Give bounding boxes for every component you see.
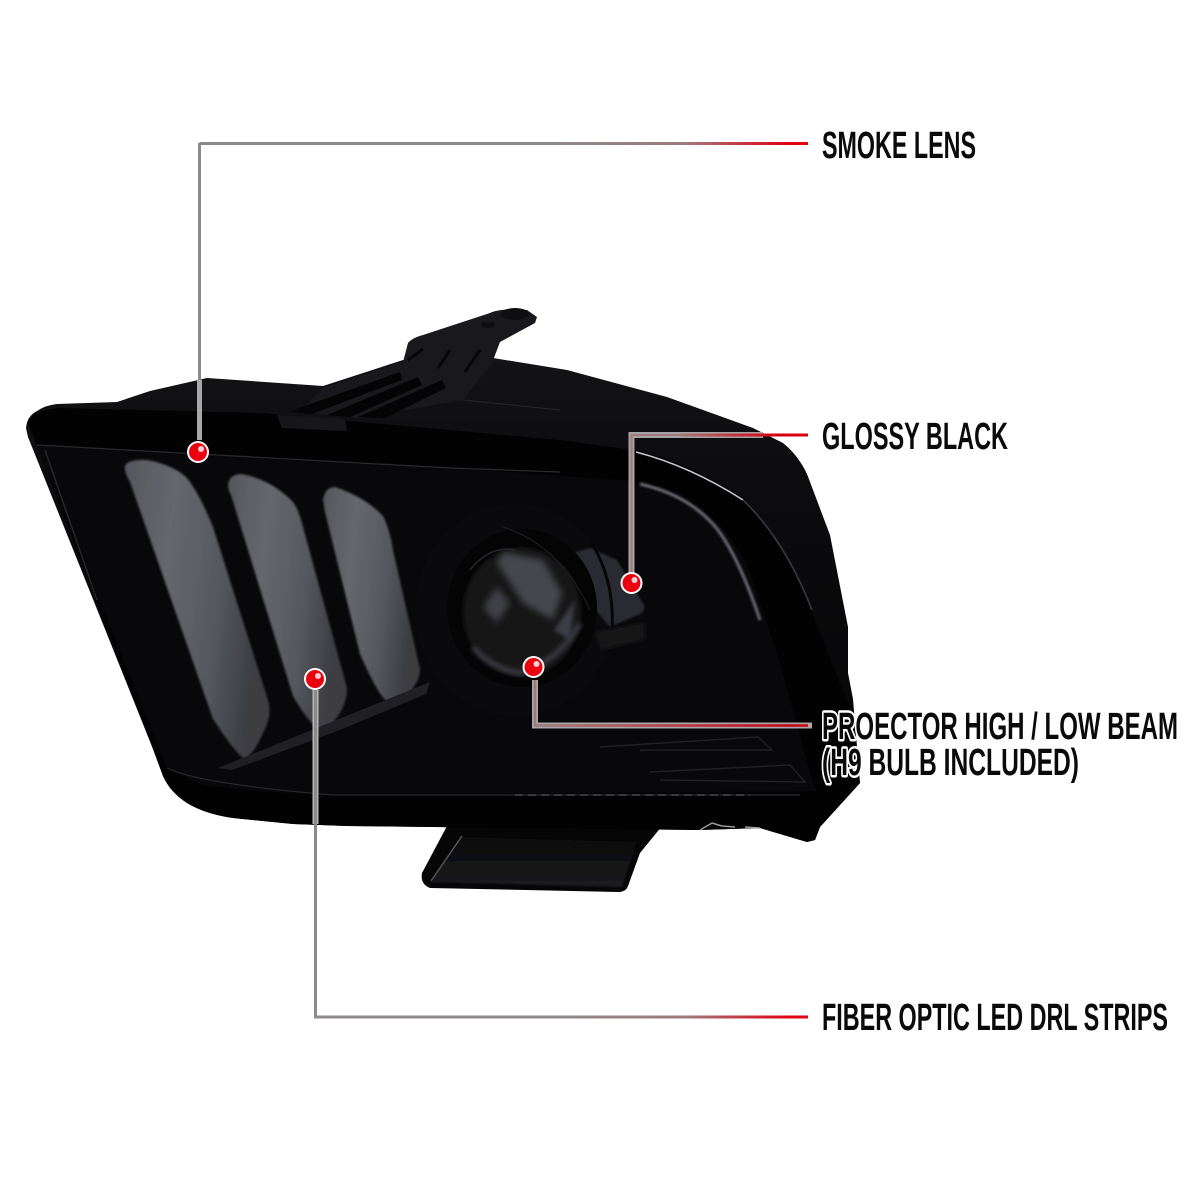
projector lens glass [463,548,581,676]
marker: smoke lens [187,441,209,463]
callout line: projector [535,680,812,726]
lower mount tab [422,826,662,892]
lower reflector detail [600,737,805,782]
glossy rim and lens body [28,408,860,842]
housing [26,358,860,842]
callout line: smoke lens [200,143,808,440]
marker: glossy black [620,572,642,594]
callout line: glossy black [632,435,808,575]
fiber optic strips [125,460,430,770]
top mounting bracket [288,308,537,418]
lens rim highlights [37,415,812,795]
label: projector [822,706,1178,784]
label: glossy black: GLOSSY BLACK [822,416,1008,458]
label: smoke lens: SMOKE LENS [822,125,976,167]
projector [415,504,645,716]
lens interior [37,445,817,795]
marker: projector [522,656,544,678]
marker: fiber strips [304,668,326,690]
projector rear bracket [560,548,645,627]
callout line: fiber optic [316,690,808,1017]
headlight [26,308,860,892]
